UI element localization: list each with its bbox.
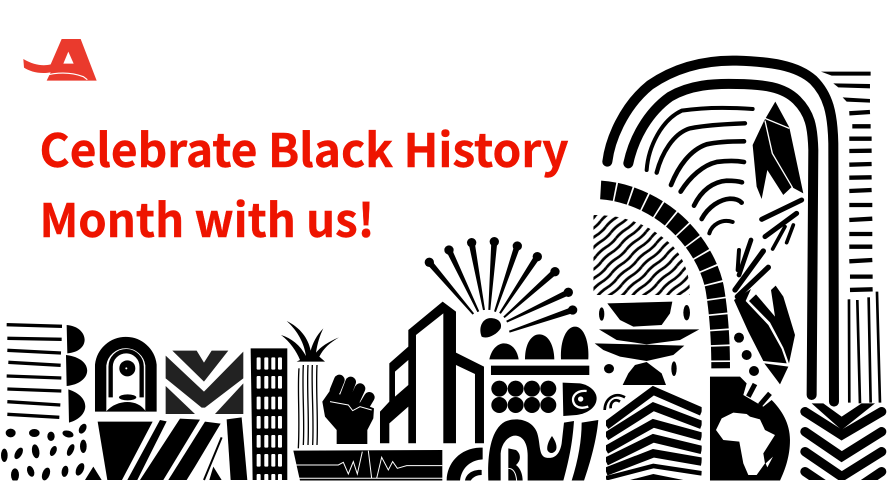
panel: hatched semicircle — [593, 215, 690, 295]
panel: bottom-right chevrons — [805, 403, 882, 484]
panel: right stripes — [821, 72, 880, 403]
title — [40, 115, 568, 251]
panel: diagonal band blocks — [85, 417, 247, 480]
panel: segmented arc band — [601, 190, 721, 368]
panel: domes, bar, circles and fish — [489, 327, 597, 416]
icon: Africa globe — [710, 377, 790, 481]
icon: raised fist — [322, 380, 374, 444]
icon: lower feather and dots — [734, 240, 795, 384]
icon: feather leaf — [753, 102, 803, 249]
logo: AARP red A — [23, 39, 97, 81]
panel: left stripes and half discs — [7, 325, 87, 423]
icon: small spiral — [605, 395, 625, 410]
icon: grass and water lines — [281, 321, 339, 448]
panel: stacked bowls — [595, 302, 699, 385]
icon: tower with windows — [251, 348, 287, 487]
title: Celebrate Black History — [40, 115, 568, 181]
icon: arch with figure — [101, 343, 151, 412]
icon: city building — [380, 302, 484, 443]
icon: sun rays — [425, 237, 577, 337]
panel: chevron building — [606, 391, 702, 480]
title: Month with us! — [40, 185, 374, 251]
panel: chevrons — [166, 351, 243, 414]
panel: seed pattern — [1, 422, 88, 482]
panel: winding snake shapes — [447, 419, 598, 481]
panel: heartbeat band — [293, 450, 443, 481]
panel: tall arches — [607, 61, 834, 402]
